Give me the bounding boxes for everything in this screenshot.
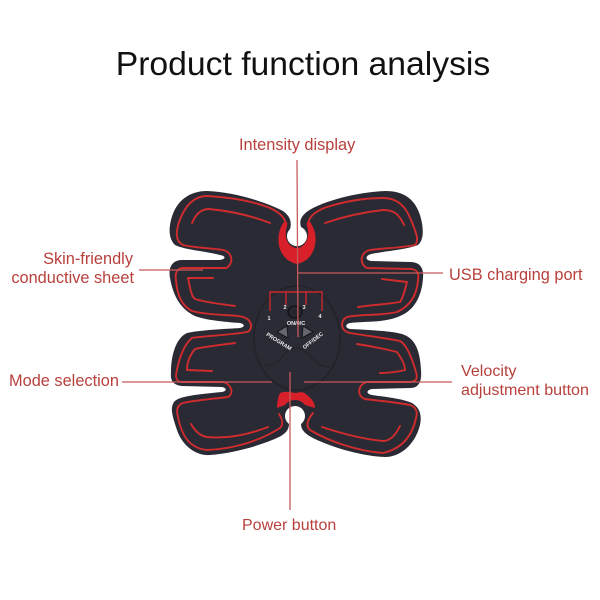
label: mode selection: Mode selection <box>9 372 119 390</box>
red crescent top <box>278 221 316 264</box>
label: usb charging port: USB charging port <box>449 266 583 284</box>
label: power button: Power button <box>242 517 336 534</box>
red crescent bottom <box>277 392 315 408</box>
pod body <box>254 286 340 390</box>
control pod <box>254 286 340 408</box>
indicator numbers: 3 <box>302 305 306 311</box>
left button <box>277 326 288 338</box>
title: Product function analysis <box>116 45 490 83</box>
indicator bracket <box>270 292 322 311</box>
label: velocity adjustment button: adjustment button <box>461 381 589 399</box>
indicator numbers: 4 <box>318 314 322 320</box>
right button <box>302 326 313 338</box>
indicator numbers <box>268 305 322 322</box>
leader lines <box>122 160 452 510</box>
program label: PROGRAM <box>265 332 293 353</box>
off/dec label: OFF/DEC <box>302 331 325 351</box>
label: skin-friendly conductive sheet: conductive sheet <box>11 269 134 287</box>
pad silhouette <box>170 191 423 457</box>
intensity display ring <box>288 306 302 318</box>
device: muscle stimulator pad <box>170 191 423 457</box>
on/off label: ON/0/C <box>287 321 305 327</box>
label: velocity adjustment button: Velocity <box>461 362 517 380</box>
red electrode outlines <box>176 196 418 453</box>
indicator numbers: 1 <box>268 316 271 322</box>
indicator numbers: 2 <box>284 305 287 311</box>
label: skin-friendly conductive sheet: Skin-friendly <box>43 250 134 268</box>
pod lower lobe <box>265 348 330 367</box>
label: intensity display: Intensity display <box>239 136 356 154</box>
